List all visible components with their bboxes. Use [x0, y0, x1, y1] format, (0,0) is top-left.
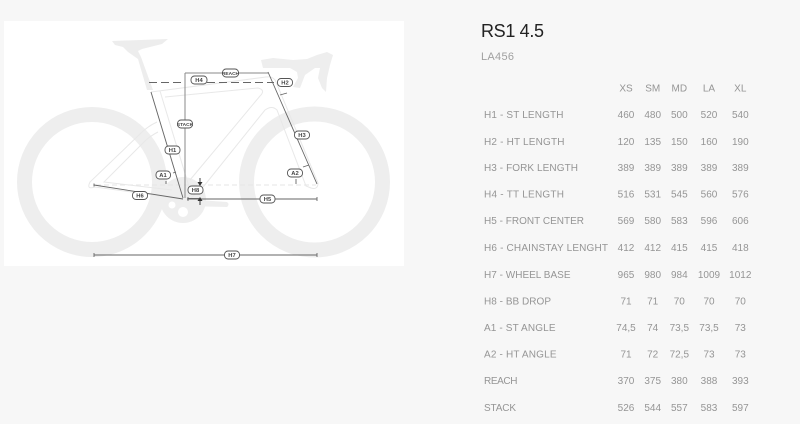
label: A2: A2 — [291, 171, 299, 177]
row: H2: 160 — [701, 137, 718, 148]
row: H3 — [484, 163, 749, 174]
row: H4: 545 — [671, 190, 688, 200]
row: H7: 1012 — [729, 270, 752, 281]
row: H3: 389 — [701, 163, 718, 174]
row: A2: 73 — [703, 350, 715, 360]
table header: sizes: SM — [645, 84, 660, 94]
row: STACK: STACK — [484, 403, 516, 414]
row: H8: 71 — [647, 296, 659, 308]
row: H3: H3 - FORK LENGTH — [484, 163, 578, 174]
label: H2: H2 — [281, 80, 289, 86]
label: H1: H1 — [169, 148, 177, 154]
row: H2: 120 — [618, 137, 635, 148]
label: REACH — [222, 69, 240, 77]
row: A2: A2 - HT ANGLE — [484, 350, 557, 360]
row: STACK — [484, 403, 749, 414]
row: H3: 389 — [671, 163, 688, 174]
icon: rear wheel — [24, 114, 160, 250]
icon: saddle and seatpost — [112, 39, 168, 90]
row: H3: 389 — [732, 163, 749, 174]
row: H2 — [484, 137, 749, 148]
row: H5: 606 — [732, 216, 749, 227]
label: H6 — [132, 192, 148, 200]
label: STACK — [177, 120, 194, 128]
row: H1: 480 — [644, 110, 661, 121]
row: A2: 73 — [735, 350, 746, 360]
label: H7: H7 — [228, 253, 236, 259]
row: H7: H7 - WHEEL BASE — [484, 270, 571, 281]
table header: sizes: XL — [734, 84, 747, 94]
row: STACK: 597 — [732, 403, 749, 414]
icon: handlebar — [261, 52, 333, 92]
table header: sizes — [619, 84, 747, 94]
title: RS1 4.5 — [481, 21, 544, 41]
label: H8: H8 — [192, 188, 200, 194]
row: A1: 73,5 — [670, 323, 689, 334]
label: H4 — [191, 76, 207, 84]
table header: sizes: XS — [619, 84, 633, 94]
row: H6 — [484, 243, 749, 254]
row: A1 — [484, 323, 746, 334]
label: H2 — [278, 78, 292, 86]
row: H6: 412 — [618, 243, 635, 254]
label: H6: H6 — [136, 194, 144, 200]
row: A2: 72 — [647, 350, 659, 360]
row: H3: 389 — [618, 163, 635, 174]
row: H2: 150 — [671, 137, 688, 148]
label: A2 — [288, 169, 302, 177]
row: H8: 71 — [620, 296, 632, 308]
row: H1: 460 — [618, 110, 635, 121]
row: H6: H6 - CHAINSTAY LENGHT — [484, 243, 608, 254]
row: H8: 70 — [674, 296, 685, 308]
row: H1: H1 - ST LENGTH — [484, 110, 564, 121]
row: H8: 70 — [735, 296, 746, 308]
row: H5: 596 — [701, 216, 718, 227]
row: REACH: 388 — [701, 376, 718, 387]
row: REACH: 393 — [732, 376, 749, 387]
row: STACK: 544 — [644, 403, 661, 414]
subtitle: model code: LA456 — [481, 51, 514, 63]
row: H8: 70 — [703, 296, 715, 308]
row: H5: 569 — [618, 216, 635, 227]
icon: chainring and crank — [160, 177, 228, 223]
row: A1: A1 - ST ANGLE — [484, 323, 556, 334]
row: A1: 73,5 — [699, 323, 719, 334]
row: STACK: 526 — [618, 403, 635, 414]
row: H4: 516 — [618, 190, 635, 200]
row: H2: 190 — [732, 137, 749, 148]
row: H4: H4 - TT LENGTH — [484, 190, 564, 200]
table header: sizes: MD — [672, 84, 687, 94]
table header: sizes: LA — [703, 84, 715, 94]
row: H3: 389 — [644, 163, 661, 174]
dimension labels — [132, 69, 310, 259]
row: H2: 135 — [644, 137, 661, 148]
label: H1 — [165, 146, 180, 154]
row: STACK: 583 — [701, 403, 718, 414]
row: H4: 560 — [701, 190, 718, 200]
label: H4: H4 — [195, 78, 203, 84]
panel: bike geometry diagram — [4, 21, 404, 266]
row: H5 — [484, 216, 749, 227]
row: H4: 531 — [644, 190, 661, 200]
label: H7 — [224, 251, 240, 259]
label: H5 — [260, 195, 275, 203]
row: H4 — [484, 190, 749, 200]
row: H8 — [484, 296, 746, 308]
row: H7: 980 — [644, 270, 661, 281]
row: H6: 415 — [671, 243, 688, 254]
label: H8 — [188, 186, 203, 194]
row: A2: 72,5 — [670, 350, 689, 360]
label: H5: H5 — [264, 197, 272, 203]
row: H7: 1009 — [698, 270, 721, 281]
row: H4: 576 — [732, 190, 749, 200]
row: H7: 984 — [671, 270, 688, 281]
row: REACH: REACH — [484, 376, 518, 387]
row: H6: 415 — [701, 243, 718, 254]
row: REACH: 380 — [671, 376, 688, 387]
row: A1: 74 — [647, 323, 659, 334]
row: H1 — [484, 110, 749, 121]
row: H1: 500 — [671, 110, 688, 121]
row: H5: 583 — [671, 216, 688, 227]
row: A1: 74,5 — [616, 323, 636, 334]
row: H5: 580 — [644, 216, 661, 227]
row: A2 — [484, 350, 746, 360]
label: H3 — [294, 131, 310, 139]
row: H2: H2 - HT LENGTH — [484, 137, 564, 148]
label: A1: A1 — [159, 173, 167, 179]
row: H7 — [484, 270, 752, 281]
row: H8: H8 - BB DROP — [484, 296, 551, 308]
row: H1: 520 — [701, 110, 718, 121]
row: A2: 71 — [620, 350, 632, 360]
row: H5: H5 - FRONT CENTER — [484, 216, 584, 227]
row: H6: 418 — [732, 243, 749, 254]
label: REACH: REACH — [222, 71, 240, 77]
label: A1 — [156, 171, 170, 179]
row: REACH: 370 — [618, 376, 635, 387]
row: A1: 73 — [735, 323, 746, 334]
label: STACK: STACK — [177, 122, 194, 128]
dimension lines — [94, 72, 317, 257]
row: H6: 412 — [644, 243, 661, 254]
row: STACK: 557 — [671, 403, 688, 414]
bike frame outline — [89, 77, 318, 199]
icon: front wheel — [246, 114, 382, 250]
row: H1: 540 — [732, 110, 749, 121]
row: REACH — [484, 376, 749, 387]
row: H7: 965 — [618, 270, 635, 281]
label: H3: H3 — [298, 133, 306, 139]
geometry table — [484, 84, 752, 414]
row: REACH: 375 — [644, 376, 661, 387]
